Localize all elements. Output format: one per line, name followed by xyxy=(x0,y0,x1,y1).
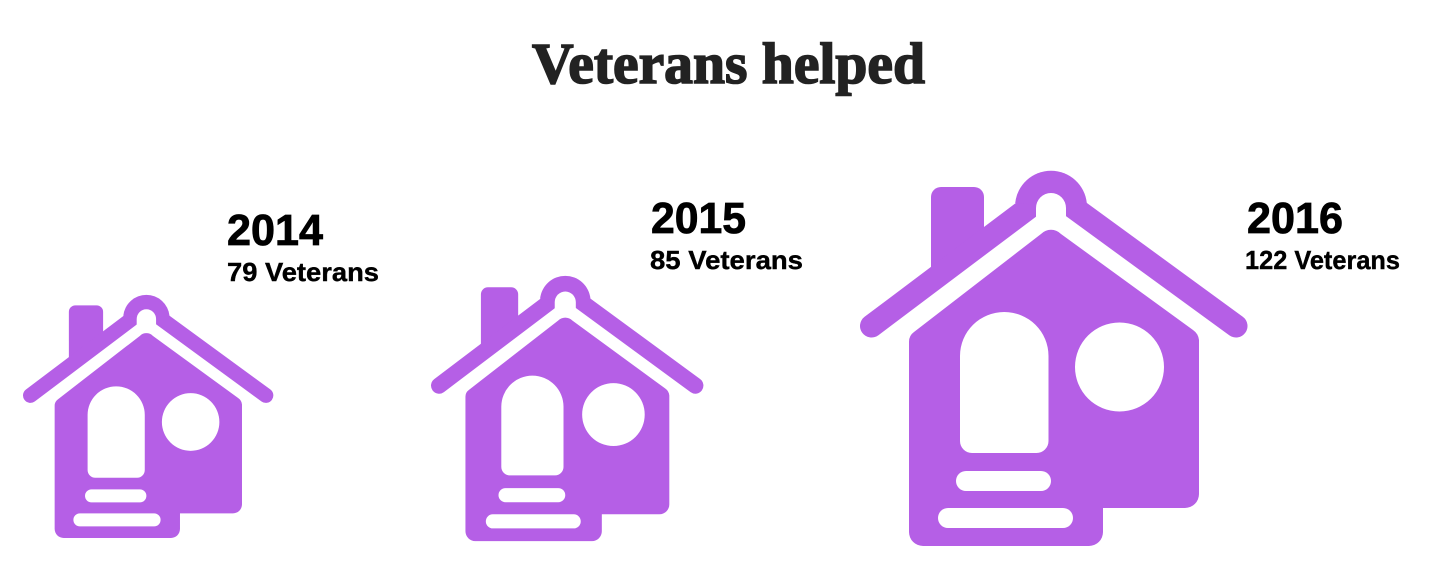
year 2016: 2016 xyxy=(1247,194,1343,243)
count 2016: 122 Veterans xyxy=(1245,245,1400,275)
icon: house 2014 xyxy=(30,295,266,538)
count 2015: 85 Veterans xyxy=(650,245,803,275)
label: 2014 xyxy=(227,206,379,287)
label: 2015 xyxy=(650,194,803,275)
year 2014: 2014 xyxy=(227,206,324,255)
year 2015: 2015 xyxy=(651,194,746,243)
icon: house 2015 xyxy=(439,276,695,541)
label: 2016 xyxy=(1245,194,1400,275)
title: Veterans helped xyxy=(532,31,925,96)
count 2014: 79 Veterans xyxy=(227,257,379,287)
icon: house 2016 xyxy=(872,171,1236,546)
